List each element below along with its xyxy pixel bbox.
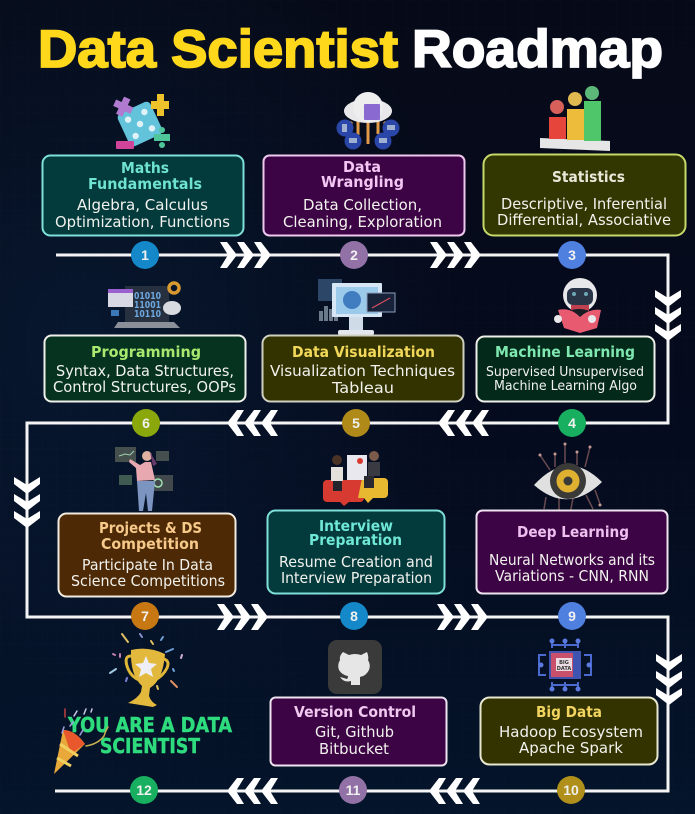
arrows: direction chevrons along the path [14,242,682,804]
panel: programming: Control Structures, OOPs [53,378,236,396]
panel: data visualization [262,336,464,402]
icon: statistics bars [540,86,610,151]
panel: maths fundamentals: Maths [121,159,169,177]
panel: version control: Version Control [294,703,416,721]
panel: programming [44,336,246,402]
panel: maths fundamentals: Algebra, Calculus [77,196,208,214]
icon: big data chip: BIG [559,660,569,666]
step markers: 8 [350,608,358,624]
icon: maths dice [111,94,170,149]
panel: data wrangling: Data [343,158,381,176]
panel: statistics: Descriptive, Inferential [501,195,667,213]
step markers: 2 [350,247,358,263]
panel: statistics: Differential, Associative [497,211,671,229]
panel: deep learning: Deep Learning [517,523,629,541]
icon: github [328,640,382,694]
panel: you are a data scientist text: SCIENTIST [100,734,200,758]
step markers: 4 [568,415,576,431]
panel: projects and ds competition: Competition [101,535,199,553]
icon: trophy and confetti [110,634,182,707]
panel: data wrangling [264,156,464,236]
panel: big data: Hadoop Ecosystem [499,723,643,741]
panel: projects and ds competition [58,514,236,596]
step markers: 6 [142,415,150,431]
icon: data cloud [336,92,400,150]
icon: robot reading [554,278,601,333]
panel: projects and ds competition: Projects & DS [99,519,202,537]
title [38,20,663,79]
panel: version control: Bitbucket [319,740,389,758]
panel: version control [270,698,446,766]
panel: you are a data scientist text [67,713,232,758]
step markers: 9 [568,608,576,624]
panel: interview preparation: Interview Preparation [281,569,432,587]
panel: interview preparation [268,510,444,594]
panel: data visualization: Visualization Techniques [270,362,455,380]
icon: programming laptop: 01010 [134,291,161,302]
panel: programming: Syntax, Data Structures, [56,362,234,380]
panel: you are a data scientist text: YOU ARE A DATA [67,713,232,737]
panel: big data: Apache Spark [519,739,623,757]
icon: programming laptop [108,283,181,328]
panel: interview preparation: Preparation [309,531,402,549]
panel: statistics [484,154,686,236]
step markers: 7 [141,608,149,624]
panel: machine learning: Machine Learning [495,343,635,361]
panel: big data [480,698,658,764]
panel: maths fundamentals: Fundamentals [88,175,202,193]
icon: party popper [54,709,108,774]
panel: maths fundamentals [42,156,244,236]
step markers: 11 [346,782,361,798]
panel: statistics: Statistics [552,168,625,186]
panel: data wrangling: Cleaning, Exploration [283,213,442,231]
icon: programming laptop: 11001 [134,300,161,311]
icon: big data chip [538,638,592,692]
panel: maths fundamentals: Optimization, Functions [55,213,230,231]
panel: interview preparation: Interview [319,517,393,535]
panel: data visualization: Tableau [331,379,394,397]
panel: deep learning: Neural Networks and its [489,551,655,569]
step markers: 1 [141,247,149,263]
roadmap path line [27,255,668,791]
panel: deep learning: Variations - CNN, RNN [495,567,649,585]
panel: version control: Git, Github [315,723,394,741]
panel: machine learning: Machine Learning Algo [494,379,637,394]
panel: big data: Big Data [536,703,602,721]
icon: big data chip: DATA [557,666,571,672]
panel: data wrangling: Data Collection, [303,196,422,214]
panel: deep learning [476,510,668,594]
panel: projects and ds competition: Science Competitions [71,572,225,590]
icon: interview people and speech bubbles [323,451,388,506]
panel: data wrangling: Wrangling [321,173,404,191]
icon: person with charts [115,447,173,511]
title: Data Scientist [38,20,398,79]
title: Roadmap [412,20,663,79]
panel: data visualization: Data Visualization [292,343,435,361]
icon: deep learning eye [534,442,602,518]
panel: machine learning [476,336,654,402]
step markers: 5 [352,415,360,431]
step markers: 10 [563,782,579,798]
panel: interview preparation: Resume Creation and [279,553,433,571]
panel: projects and ds competition: Participate In Data [82,556,213,574]
step markers [130,241,586,804]
icon: data visualization monitor [318,279,395,335]
icon: programming laptop: 10110 [134,309,161,320]
panel: machine learning: Supervised Unsupervised [486,365,644,380]
panel: programming: Programming [91,343,201,361]
step markers: 12 [136,782,152,798]
step markers: 3 [568,247,576,263]
